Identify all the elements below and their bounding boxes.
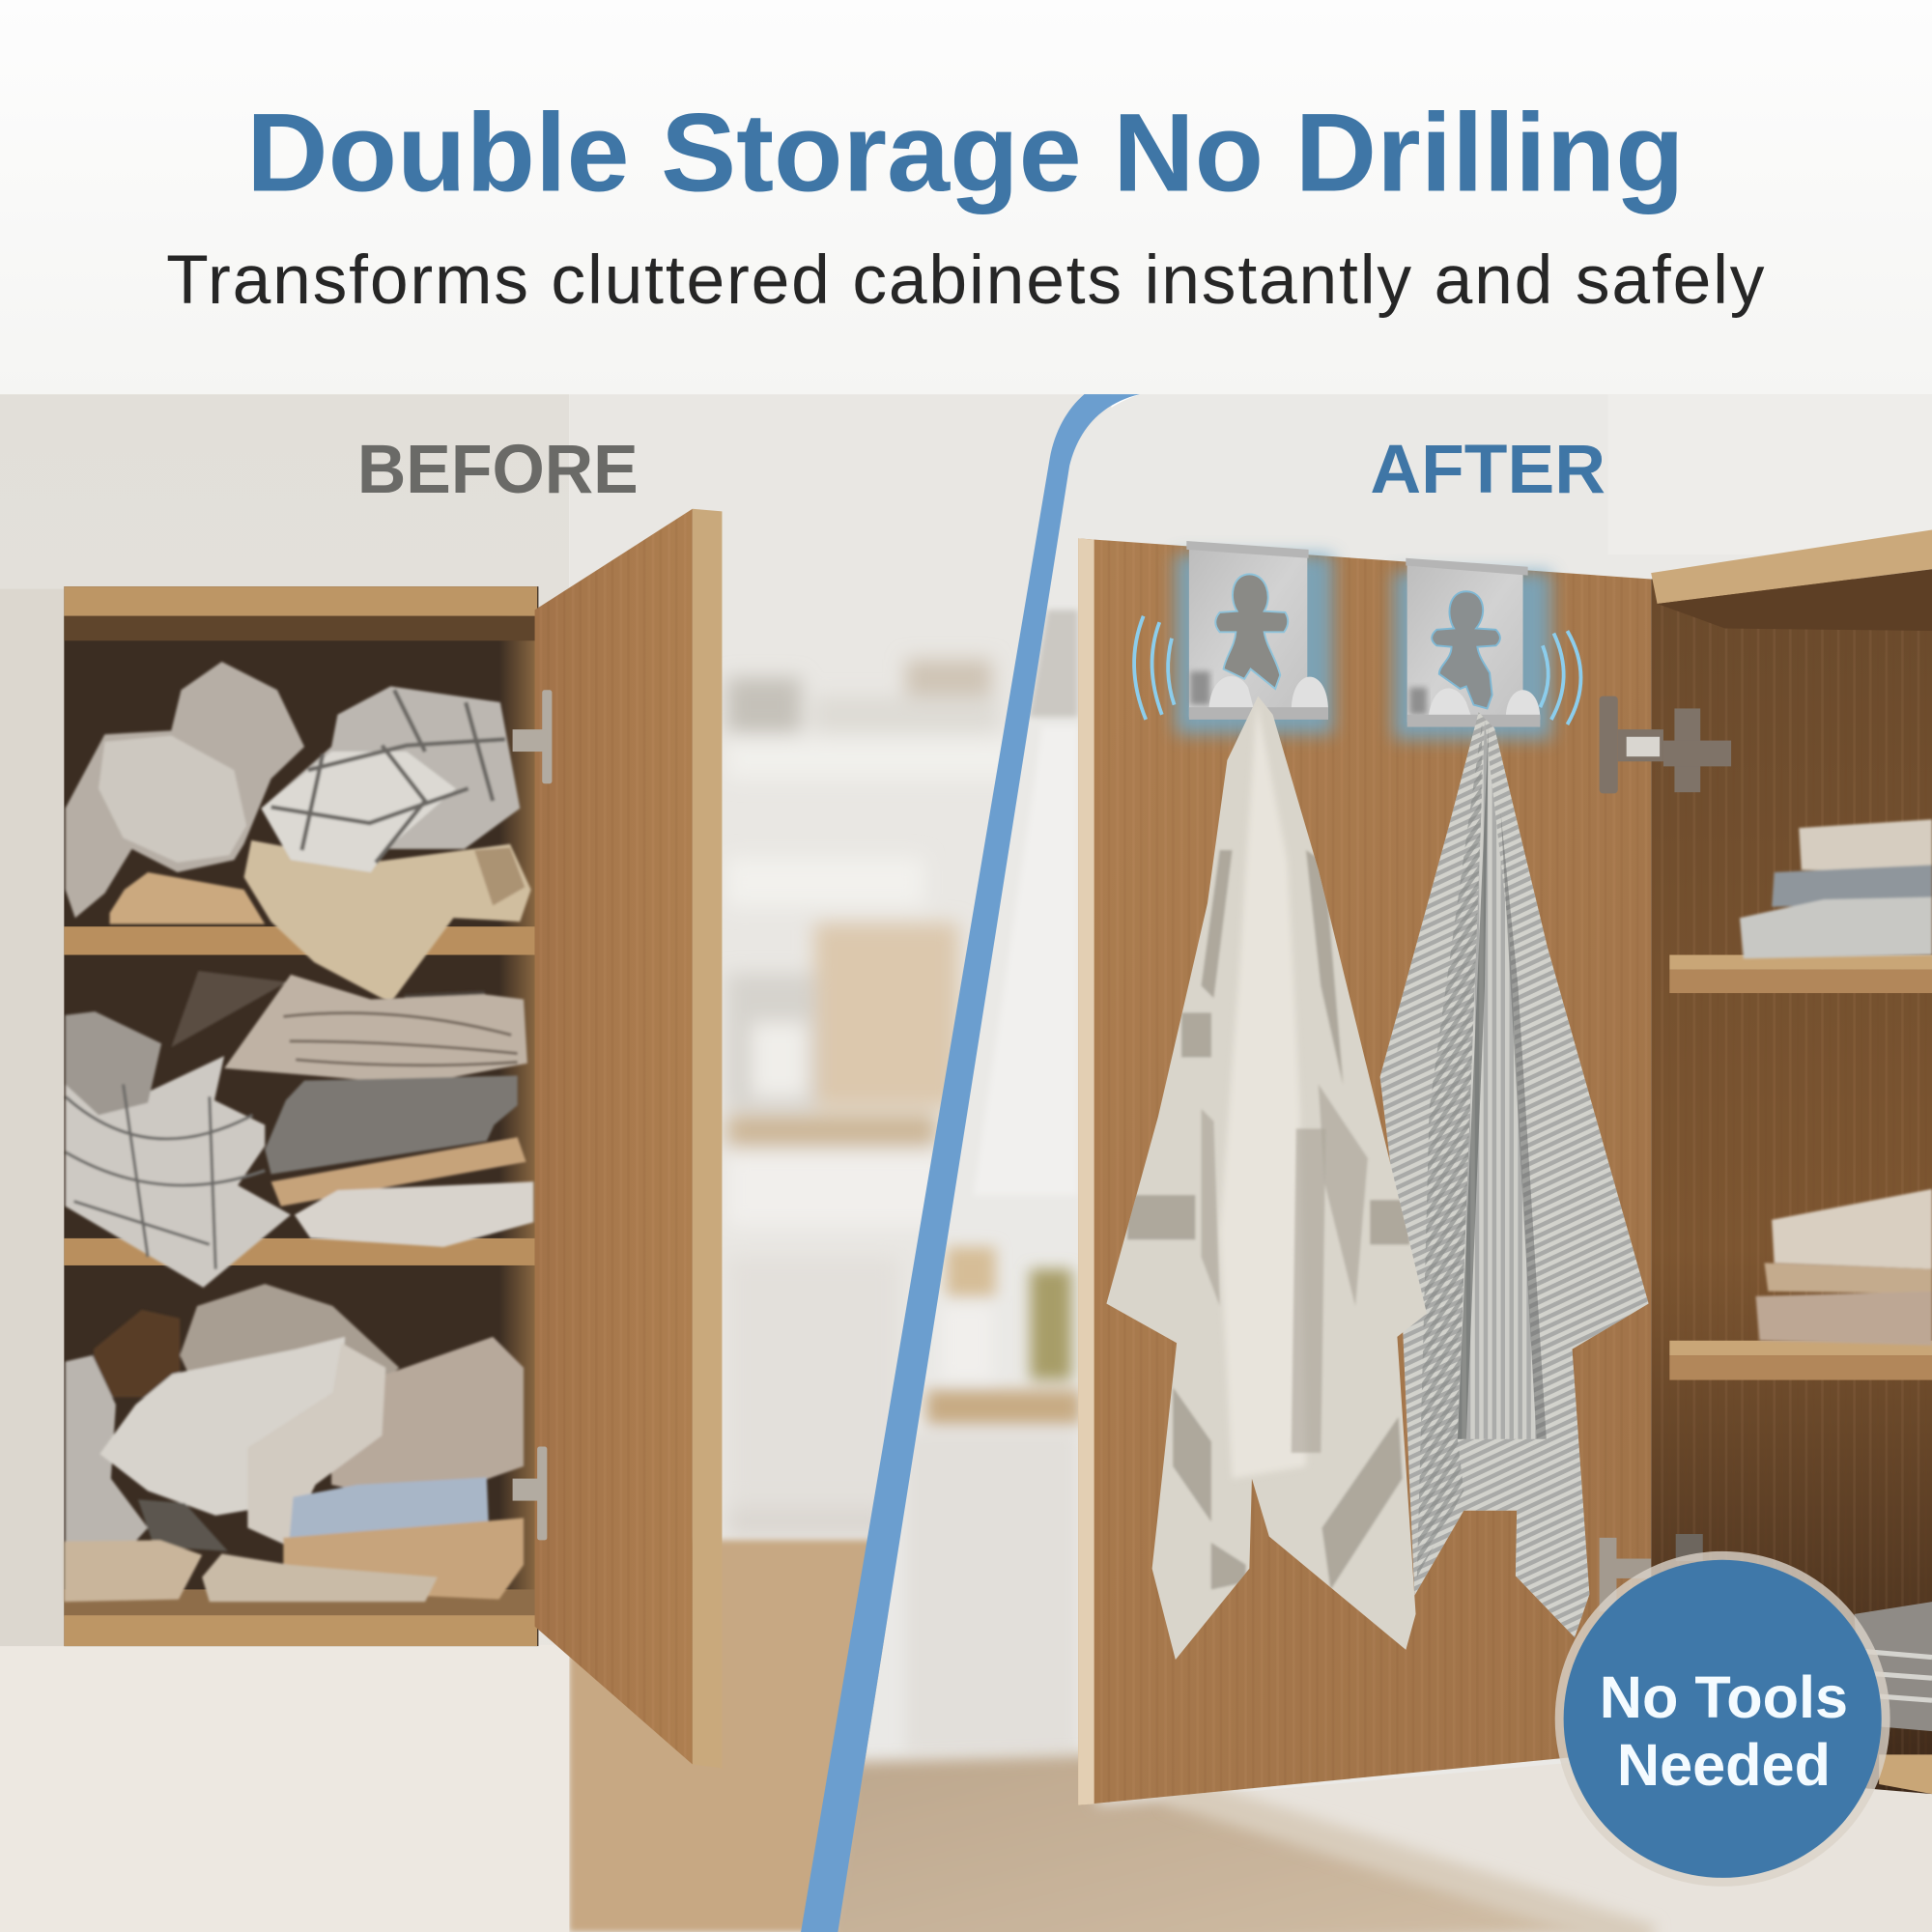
towels: top shelf: [66, 662, 531, 1003]
soft floor shadow edge: [1171, 1789, 1651, 1932]
subtitle: Transforms cluttered cabinets instantly and safely: [166, 242, 1765, 319]
hook 1 glow: [1176, 554, 1333, 734]
hinge: right door: [1600, 696, 1731, 793]
towel 2: [1380, 712, 1649, 1637]
hook 2 glow: [1394, 572, 1551, 739]
towels: middle shelf: [66, 971, 533, 1288]
white cabinet below door: [1194, 1763, 1932, 1932]
hook 1: [1186, 541, 1328, 720]
panel: after scene background: [826, 394, 1932, 1932]
cabinet door: open: [535, 509, 722, 1768]
towel 1: [1106, 696, 1427, 1660]
badge text: No Tools: [1600, 1664, 1848, 1730]
open door with towel hooks: [1078, 529, 1932, 1932]
hinge: lower right: [1600, 1534, 1703, 1611]
messy cabinet: [0, 509, 722, 1768]
floor: [826, 1754, 1637, 1932]
vibration arcs right: [1540, 631, 1580, 724]
header band: [0, 0, 1932, 394]
vibration arcs left: [1134, 616, 1175, 720]
divider stripe: [801, 394, 1140, 1932]
blurred kitchen background: [727, 659, 1023, 1538]
cabinet door: inside face: [1078, 538, 1651, 1805]
label: after: AFTER: [1370, 431, 1605, 508]
badge text: Needed: [1617, 1732, 1831, 1798]
hook 2: [1406, 558, 1540, 727]
label: before: BEFORE: [357, 431, 639, 508]
right cabinet interior: [1651, 529, 1932, 1799]
panel: before scene: [0, 394, 1112, 1932]
hinges: left door: [513, 690, 552, 1540]
badge: no tools needed: [1555, 1551, 1890, 1887]
title: Double Storage No Drilling: [246, 92, 1685, 215]
towels: bottom shelf: [64, 1284, 524, 1602]
